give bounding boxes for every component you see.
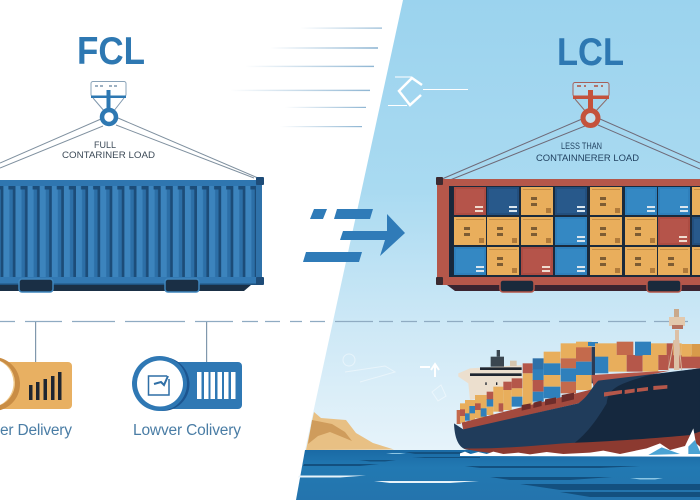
LCL sublabel bbox=[536, 141, 639, 164]
label: blue badge: Lowver Colivery bbox=[133, 422, 241, 439]
sea bbox=[296, 450, 700, 500]
title: LCL: LCL bbox=[557, 31, 624, 74]
hill bbox=[306, 412, 394, 450]
container ship bbox=[454, 340, 700, 457]
FCL crane hook and ropes bbox=[0, 82, 258, 178]
superstructure bbox=[458, 350, 522, 400]
faint sky icons bbox=[343, 354, 446, 401]
LCL crane hook and ropes bbox=[442, 82, 700, 180]
icon: white diamond with lines bbox=[388, 77, 468, 106]
transfer arrow bbox=[303, 209, 405, 262]
deck rail bbox=[462, 389, 592, 430]
mast top bbox=[669, 309, 685, 342]
small white arrow bbox=[420, 364, 439, 377]
icon: blue delivery badge bbox=[132, 356, 242, 411]
mast bbox=[668, 340, 682, 370]
connector: yellow badge bbox=[35, 322, 36, 363]
FCL blue container bbox=[0, 177, 264, 292]
FCL sublabel bbox=[62, 140, 155, 161]
background: sky panel bbox=[305, 0, 700, 450]
icon: yellow delivery badge bbox=[0, 357, 72, 411]
LCL sublabel: LESS THAN bbox=[561, 141, 602, 152]
bow wave bbox=[460, 428, 700, 457]
FCL sublabel: FULL bbox=[94, 140, 116, 151]
dashed divider bbox=[0, 320, 688, 322]
hull bbox=[454, 368, 700, 450]
label: yellow badge: er Delivery bbox=[0, 422, 72, 439]
connector: blue badge bbox=[206, 322, 207, 363]
red boot bbox=[463, 432, 700, 455]
sea highlights and shadows bbox=[298, 452, 700, 497]
speed lines bbox=[230, 28, 382, 127]
LCL red container with cargo bbox=[436, 177, 700, 292]
FCL sublabel: CONTARINER LOAD bbox=[62, 150, 155, 161]
portholes bbox=[604, 385, 667, 397]
deck cargo bbox=[457, 342, 700, 424]
title: FCL: FCL bbox=[77, 30, 145, 73]
LCL sublabel: CONTAINNERER LOAD bbox=[536, 153, 639, 164]
